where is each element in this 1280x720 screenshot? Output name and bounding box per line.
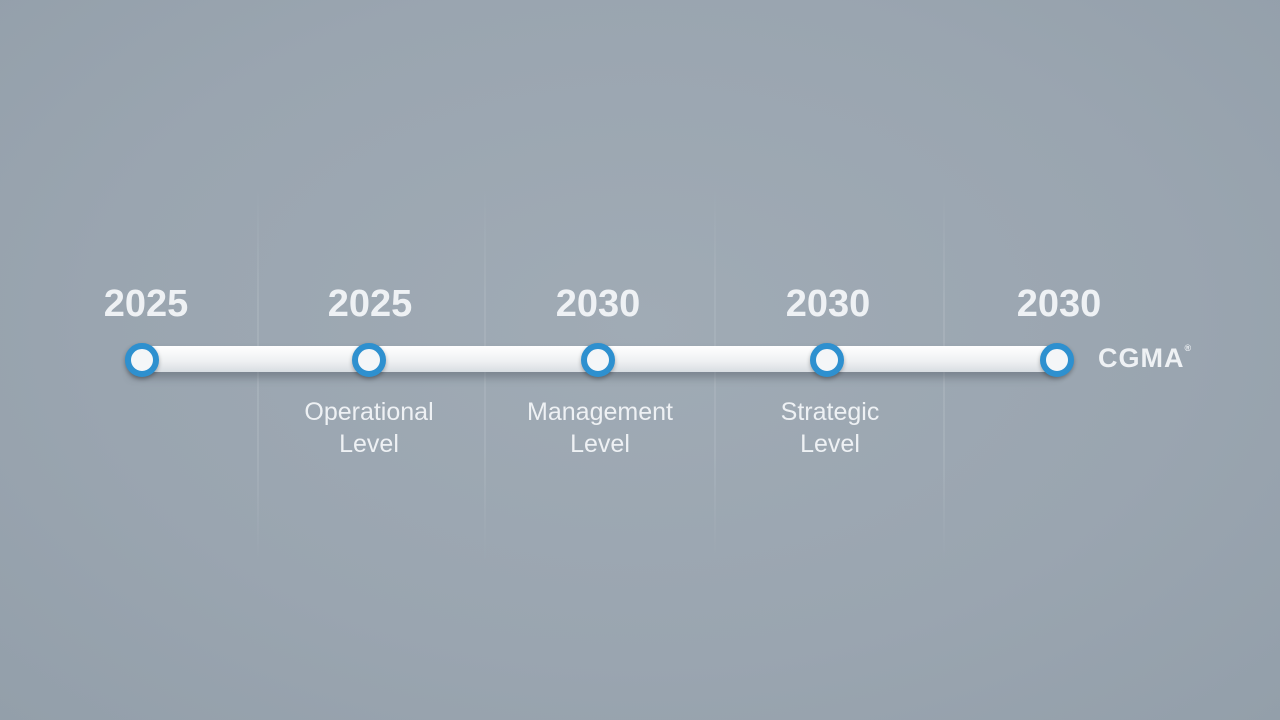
label: Strategic Level: Strategic [781,398,879,426]
label: CGMA: CGMA® [1098,343,1192,373]
label: Operational Level: Operational [304,398,434,426]
year: 2030: 2030 [556,283,640,325]
year: 2025 second: 2025 [328,283,412,325]
node 1 [125,343,159,377]
node 2 [352,343,386,377]
label: Operational Level [304,398,434,458]
year: 2030 third: 2030 [1017,283,1101,325]
year: 2025: 2025 [104,283,188,325]
node 4 [810,343,844,377]
label: Management Level [527,398,673,458]
label: Operational Level: Level [339,430,399,458]
label: Strategic Level: Level [800,430,860,458]
node 3 [581,343,615,377]
label: Management Level: Management [527,398,673,426]
node 5 [1040,343,1074,377]
year: 2030 second: 2030 [786,283,870,325]
timeline bar [130,346,1058,372]
label: Management Level: Level [570,430,630,458]
label: Strategic Level [781,398,879,458]
